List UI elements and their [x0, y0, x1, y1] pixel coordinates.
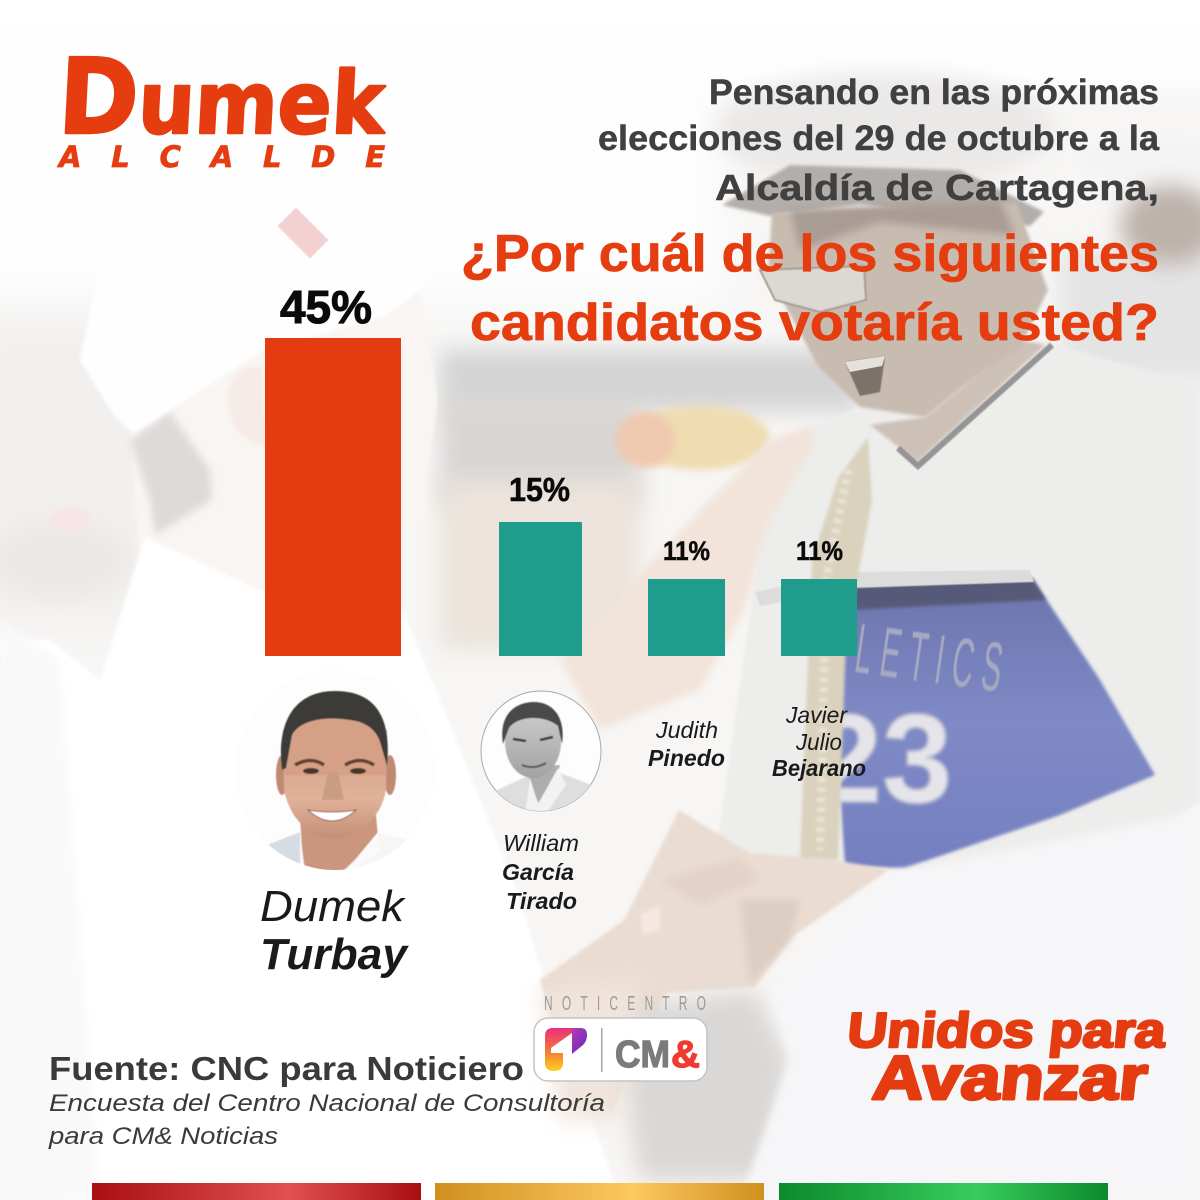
source text: Encuesta del Centro Nacional de Consultoría	[49, 1090, 605, 1117]
neck and face	[870, 340, 1045, 462]
logo wordmark: Dumek: Dumek	[56, 37, 390, 158]
name: Javier Julio Bejarano	[772, 702, 866, 781]
logo badge	[534, 1018, 707, 1081]
supporter's shirt	[715, 340, 1200, 880]
portrait: Dumek Turbay	[268, 690, 406, 870]
arm on the shoulder	[560, 425, 815, 730]
heading: survey question intro	[598, 73, 1160, 208]
name: Judith Pinedo	[648, 717, 725, 771]
the supporter's cap	[717, 68, 1048, 175]
bar: William García Tirado 15%: 15%	[509, 471, 570, 508]
bar: Judith Pinedo 11%	[648, 536, 725, 656]
left man's cap	[80, 292, 416, 432]
left man's head	[428, 369, 438, 428]
collar stripe	[898, 345, 1052, 466]
bar chart: voting intention	[265, 281, 857, 656]
name: Javier Julio Bejarano: Julio	[795, 729, 842, 755]
name: William García Tirado: Tirado	[506, 888, 577, 914]
bead necklace	[800, 437, 872, 860]
bar: William García Tirado 15%	[499, 471, 582, 656]
logo: Noticentro 1 CM&amp;	[534, 993, 707, 1081]
logo: Dumek Alcalde	[56, 37, 390, 174]
heading: survey question intro: elecciones del 29 de octubre a la	[598, 119, 1160, 158]
name: William García Tirado: William	[503, 830, 579, 856]
name: Dumek Turbay: Turbay	[260, 930, 410, 979]
source text: para CM& Noticias	[48, 1123, 278, 1150]
name: Judith Pinedo: Judith	[655, 717, 718, 743]
logo badge: CM	[615, 1034, 670, 1076]
name: Javier Julio Bejarano: Javier	[785, 702, 848, 728]
heading: main question: ¿Por cuál de los siguientes	[461, 225, 1159, 283]
slogan: Unidos para Avanzar: Avanzar	[870, 1044, 1151, 1113]
bar: Javier Julio Bejarano 11%	[781, 536, 857, 656]
forearm and dark sleeve	[610, 990, 790, 1180]
footer stripes: red, yellow, green	[92, 1183, 1108, 1200]
name: Dumek Turbay: Dumek	[260, 882, 406, 931]
left man's shirt	[0, 537, 620, 1200]
bar: Judith Pinedo 11%: 11%	[663, 536, 710, 566]
slogan: Unidos para Avanzar: Unidos para	[845, 1004, 1169, 1058]
source text: Fuente: CNC para Noticiero	[49, 1050, 524, 1087]
blue shirt panel	[830, 578, 1155, 868]
portrait: William García Tirado	[481, 691, 601, 815]
shirt number: 23	[812, 688, 952, 829]
heading: survey question intro: Alcaldía de Cartagena,	[715, 167, 1159, 208]
name: William García Tirado: García	[502, 859, 574, 885]
name: William García Tirado	[502, 830, 579, 914]
slogan: Unidos para Avanzar	[845, 1004, 1169, 1113]
shaking hands	[539, 810, 888, 1017]
bar: Dumek Turbay 45%	[265, 281, 401, 656]
bar: Dumek Turbay 45%: 45%	[280, 281, 372, 333]
logo tagline: Alcalde: ALCALDE	[57, 140, 385, 174]
shirt lettering: LETICS	[851, 610, 1007, 707]
name: Judith Pinedo: Pinedo	[648, 745, 725, 771]
heading: survey question intro: Pensando en las próximas	[709, 73, 1159, 112]
white sleeve	[746, 820, 1171, 1188]
logo caption: Noticentro: NOTICENTRO	[544, 993, 706, 1015]
heading: main question: candidatos votaría usted?	[470, 294, 1159, 352]
name: Dumek Turbay	[260, 882, 410, 979]
bar: Javier Julio Bejarano 11%: 11%	[796, 536, 843, 566]
source text	[48, 1050, 605, 1150]
heading: main question	[461, 225, 1159, 352]
logo badge: &	[671, 1034, 700, 1076]
name: Javier Julio Bejarano: Bejarano	[772, 755, 866, 781]
